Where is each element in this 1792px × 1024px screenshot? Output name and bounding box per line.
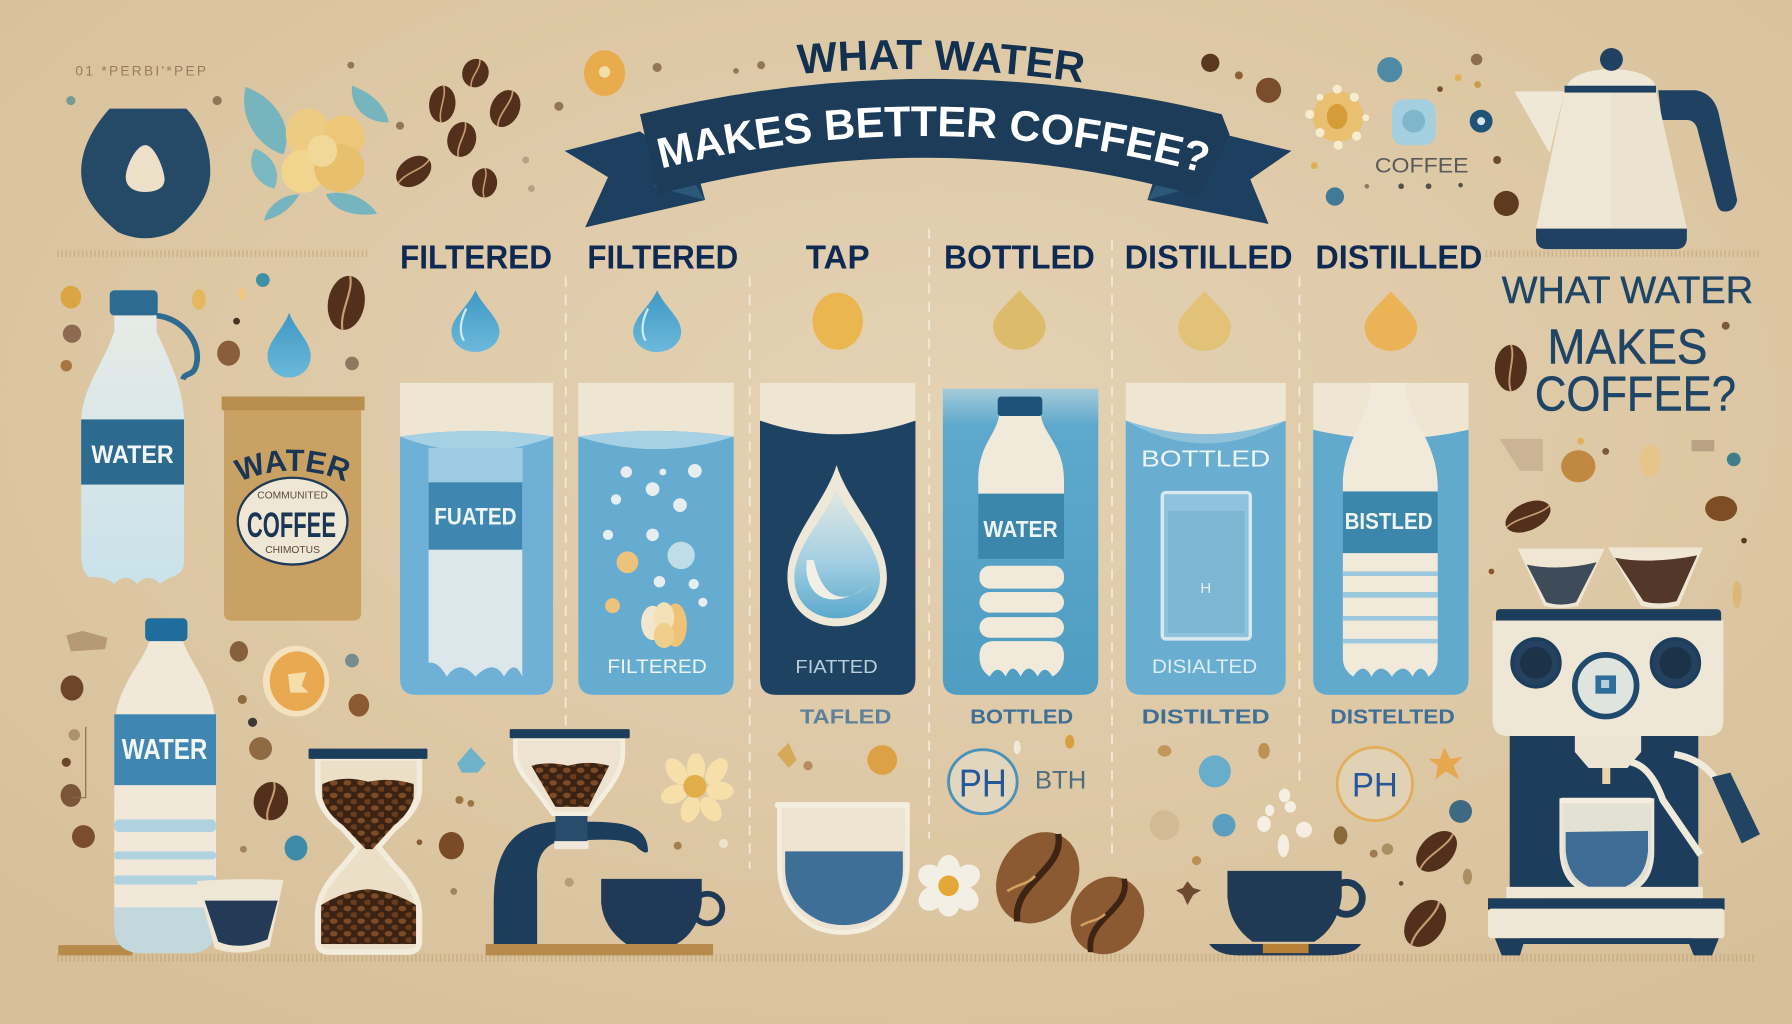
flower in panel 2 [641,602,687,648]
icon row: drops [451,290,1417,352]
icon: big coffee beans [979,816,1159,968]
group head [1575,736,1641,768]
column headings: FILTERED [587,240,738,277]
icon: yellow flower [658,753,734,826]
espresso machine [1488,547,1760,955]
coffee bag: CHIMOTUS [265,545,320,556]
glass: H [1200,581,1211,597]
bubbles [603,464,707,613]
ph badge gold [1337,747,1413,821]
center glass of water [775,802,910,933]
column headings: TAP [806,240,870,277]
cups on top [1518,547,1703,608]
right heading: WHAT WATER [1502,269,1753,311]
bottle in panel 4 [978,397,1064,677]
machine head [1496,609,1721,621]
scattered specks top left [66,61,765,192]
steam dots [1257,789,1312,857]
scattered elements lower left [61,631,486,895]
left bottle small: WATER [91,441,174,469]
panel dividers [566,229,1299,869]
scattered elements right column [1489,322,1747,608]
labels under panels [800,705,1455,728]
labels under panels: DISTELTED [1330,705,1455,728]
panel: bottled [943,389,1098,695]
text: bth: BTH [1035,767,1086,795]
machine column [1510,731,1698,891]
bottle in panel 6: BISTLED [1345,508,1433,534]
panel 2 label: FILTERED [607,656,707,678]
right heading: MAKES [1547,320,1707,374]
right heading [1502,269,1753,421]
icon: coffee beans top [390,55,526,198]
coffee bag: COFFEE [247,505,336,545]
icon: orange circle [584,50,625,96]
panel 5 bottled label: BOTTLED [1141,445,1270,471]
title ribbon [564,78,1292,228]
icon: navy jar [81,109,210,238]
small specks center [565,743,897,887]
pour over brewer [486,729,713,955]
navy mug left [601,879,722,944]
small coffee cup [197,879,283,953]
left bottle large: WATER [122,734,208,766]
labels under panels: DISTILTED [1142,705,1270,728]
panel 1 label: FUATED [434,504,517,531]
panel: distilled 2 [1313,383,1469,695]
column headings [400,240,1482,277]
column headings: DISTILLED [1315,240,1482,277]
glass cup [1561,800,1653,891]
kettle [1514,48,1737,249]
left bottle small [81,290,197,584]
labels under panels: BOTTLED [970,705,1073,728]
dials [1512,639,1699,717]
icon: white daisy [914,855,984,917]
column headings: FILTERED [400,240,552,277]
panel: filtered 2 [578,383,734,695]
small coffee label cluster [1201,54,1519,216]
steam wand [1631,762,1701,855]
column headings: DISTILLED [1125,240,1293,277]
ribbon text: MAKES BETTER COFFEE? [657,106,1208,171]
labels under panels: TAFLED [800,705,891,728]
small coffee beans right [1395,823,1465,955]
title: what water: WHAT WATER [796,40,1084,82]
ph badge blue [949,750,1017,814]
column headings: BOTTLED [944,240,1095,277]
small specks lower right [1014,735,1472,905]
panel 3 label: FIATTED [795,656,878,677]
small coffee label: COFFEE [1375,153,1469,178]
coffee bag: COMMUNITED [257,490,328,501]
panel 5 label: DISIALTED [1152,656,1257,678]
bottle in panel 4: WATER [983,516,1058,542]
panel: filtered 1 [400,383,553,695]
hourglass [309,749,427,952]
left bottle large [58,618,216,955]
coffee bag: WATER [232,450,350,482]
glass [1162,493,1250,639]
large water drop [787,465,887,626]
base [1506,887,1703,898]
panel: distilled 1 [1126,383,1286,695]
right heading: COFFEE? [1535,367,1736,421]
navy mug right [1209,871,1362,955]
icon: citrus slice [263,646,329,717]
icon: flower with leaves [244,86,389,221]
panel: tap [760,383,915,695]
coffee bag [222,396,365,621]
ph badge gold: PH [1352,767,1398,805]
ph badge blue: PH [959,763,1007,806]
ground lines [57,254,1760,958]
bottle in panel 6 [1343,383,1438,677]
scattered elements near left bottle [61,273,369,378]
scattered specks top left: 01 *PERBI'*PEP [75,63,208,78]
